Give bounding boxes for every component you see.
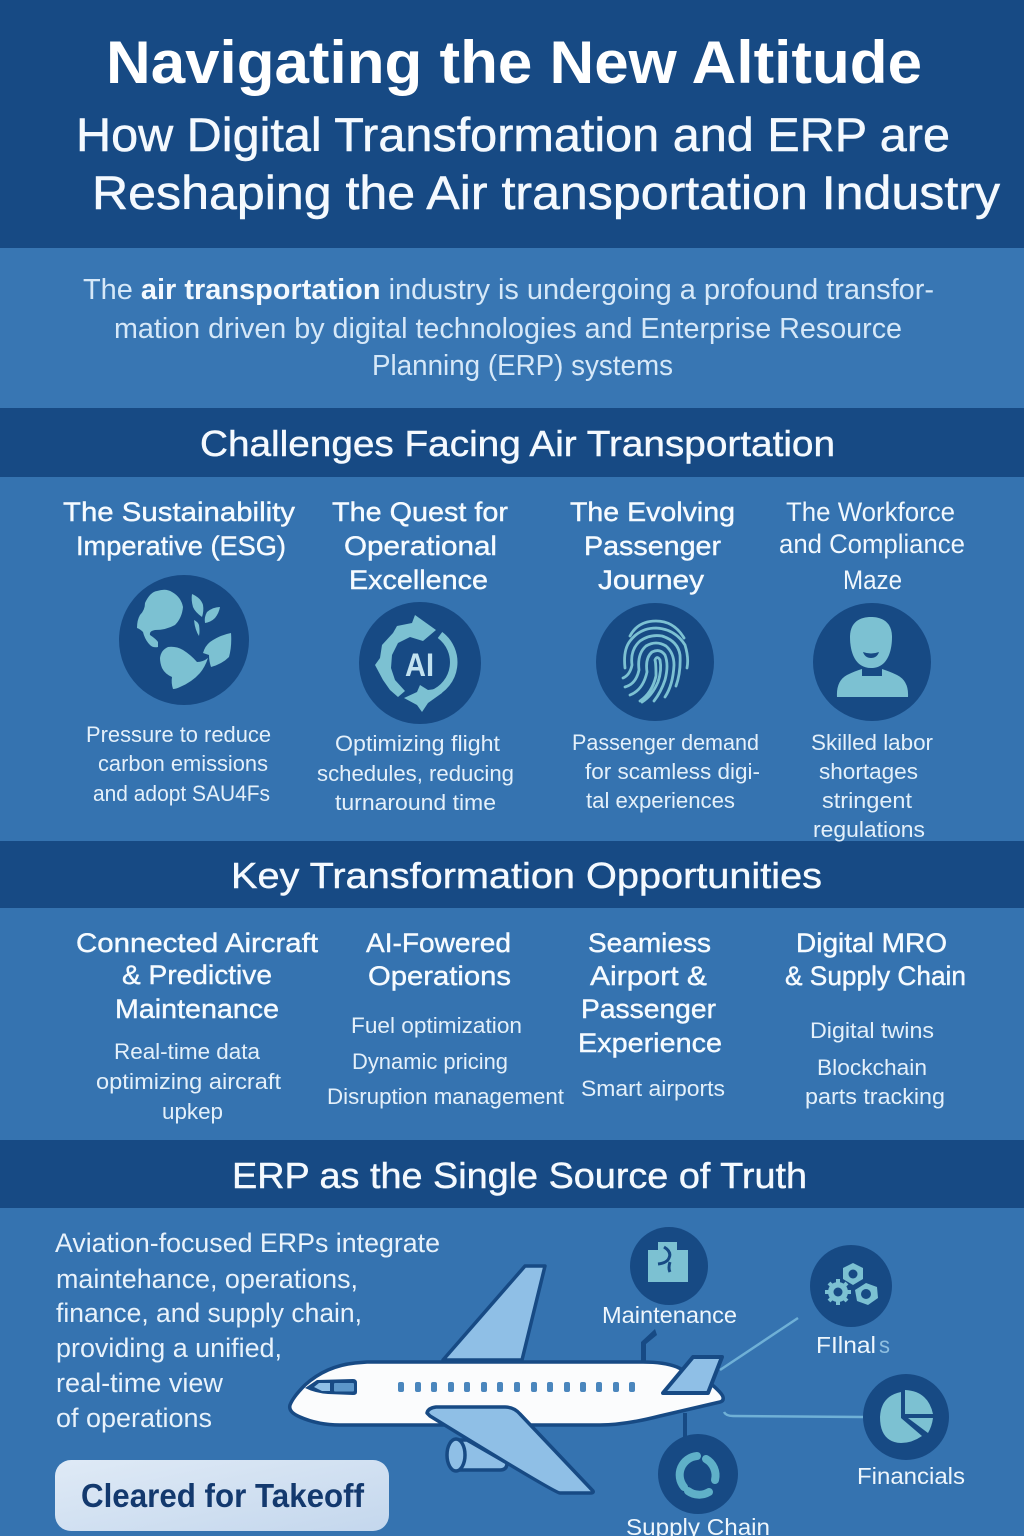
panel: connected aircraft: Real-time data bbox=[114, 1039, 261, 1064]
panel: introduction: The air transportation industry is undergoing a profound transfor- bbox=[83, 274, 934, 306]
panel: digital MRO: & Supply Chain bbox=[785, 961, 966, 991]
panel: connected aircraft: upkep bbox=[162, 1099, 223, 1124]
antenna bbox=[641, 1329, 657, 1362]
panel: AI operations: Disruption management bbox=[327, 1084, 564, 1109]
description: passenger journey bbox=[572, 730, 760, 813]
heading: workforce: The Workforce bbox=[786, 497, 955, 527]
icon: maintenance toolbox bbox=[630, 1227, 708, 1305]
description: workforce: shortages bbox=[819, 759, 918, 784]
text block: ERP description: real-time view bbox=[56, 1368, 223, 1398]
section heading: ERP: ERP as the Single Source of Truth bbox=[232, 1155, 807, 1196]
panel: AI operations: Dynamic pricing bbox=[352, 1049, 508, 1074]
icon: AI cycle: AI bbox=[405, 647, 434, 683]
panel: introduction: Planning (ERP) systems bbox=[372, 350, 673, 382]
airplane illustration bbox=[290, 1266, 723, 1493]
heading: passenger journey bbox=[570, 497, 735, 595]
icon: fingerprint bbox=[596, 603, 714, 721]
panel: introduction: mation driven by digital technologies and Enterprise Resource bbox=[114, 313, 902, 345]
node: parts: s bbox=[879, 1332, 890, 1358]
description: workforce bbox=[811, 730, 933, 842]
connector: tail to financials bbox=[724, 1412, 863, 1417]
heading: sustainability: Imperative (ESG) bbox=[76, 531, 286, 561]
panel: connected aircraft: Connected Aircraft bbox=[76, 928, 319, 958]
connector: fuselage to supply chain bbox=[683, 1413, 687, 1440]
cabin windows bbox=[398, 1382, 635, 1392]
panel: digital MRO: parts tracking bbox=[805, 1084, 945, 1109]
node: maintenance bbox=[602, 1227, 737, 1328]
panel: connected aircraft bbox=[76, 928, 319, 1124]
panel: AI operations bbox=[327, 928, 564, 1109]
panel: AI operations: AI-Fowered bbox=[366, 928, 511, 958]
text block: ERP description bbox=[55, 1228, 440, 1433]
description: sustainability: carbon emissions bbox=[98, 751, 268, 776]
panel: AI operations: Operations bbox=[368, 961, 511, 991]
panel: connected aircraft: & Predictive bbox=[122, 960, 272, 990]
description: workforce: Skilled labor bbox=[811, 730, 933, 755]
description: passenger journey: tal experiences bbox=[586, 788, 735, 813]
heading: sustainability bbox=[63, 497, 296, 561]
icon: pie chart bbox=[863, 1374, 949, 1460]
icon: gears bbox=[810, 1245, 892, 1327]
section heading: challenges bbox=[0, 408, 1024, 477]
panel: seamless airport bbox=[578, 928, 725, 1101]
description: operational excellence: turnaround time bbox=[335, 790, 496, 815]
panel: sustainability challenge bbox=[63, 497, 296, 806]
panel: digital MRO: Digital twins bbox=[810, 1018, 934, 1043]
node: financials bbox=[857, 1374, 965, 1489]
callout button bbox=[55, 1460, 389, 1531]
description: workforce: stringent bbox=[822, 788, 912, 813]
cockpit windows bbox=[305, 1379, 357, 1395]
node: parts: FIlnal bbox=[816, 1332, 876, 1358]
panel: connected aircraft: Maintenance bbox=[115, 994, 279, 1024]
panel: seamless airport: Passenger bbox=[581, 994, 716, 1024]
description: operational excellence: schedules, reducing bbox=[317, 761, 514, 786]
description: sustainability bbox=[86, 722, 271, 806]
title banner bbox=[0, 0, 1024, 248]
fuselage bbox=[290, 1362, 723, 1425]
node: parts bbox=[810, 1245, 892, 1358]
text block: ERP description: providing a unified, bbox=[56, 1333, 282, 1363]
heading: workforce: and Compliance bbox=[779, 529, 965, 559]
tail fin bbox=[663, 1357, 722, 1393]
description: sustainability: Pressure to reduce bbox=[86, 722, 271, 747]
subtitle: How Digital Transformation and ERP are bbox=[76, 108, 950, 161]
description: operational excellence: Optimizing flight bbox=[335, 731, 500, 756]
icon: globe with leaves bbox=[119, 575, 249, 705]
node: financials: Financials bbox=[857, 1463, 965, 1489]
text block: ERP description: finance, and supply chain, bbox=[56, 1298, 362, 1328]
panel: operational excellence challenge bbox=[317, 497, 514, 815]
description: sustainability: and adopt SAU4Fs bbox=[93, 781, 270, 806]
node: maintenance: Maintenance bbox=[602, 1302, 737, 1328]
section heading: challenges: Challenges Facing Air Transportation bbox=[200, 423, 835, 464]
text block: ERP description: of operations bbox=[56, 1403, 212, 1433]
text block: ERP description: Aviation-focused ERPs integrate bbox=[55, 1228, 440, 1258]
panel: seamless airport: Smart airports bbox=[581, 1076, 725, 1101]
description: workforce: regulations bbox=[813, 817, 925, 842]
panel: seamless airport: Airport & bbox=[590, 961, 707, 991]
subtitle: Reshaping the Air transportation Industry bbox=[92, 166, 1001, 219]
icon: AI cycle bbox=[359, 602, 481, 724]
description: passenger journey: for scamless digi- bbox=[585, 759, 760, 784]
panel: workforce challenge bbox=[779, 497, 965, 842]
heading: workforce bbox=[779, 497, 965, 595]
callout button: Cleared for Takeoff bbox=[81, 1477, 365, 1514]
description: operational excellence bbox=[317, 731, 514, 815]
heading: operational excellence: Excellence bbox=[349, 565, 488, 595]
subtitle bbox=[76, 108, 1001, 219]
title: Navigating the New Altitude bbox=[106, 29, 922, 96]
heading: operational excellence: Operational bbox=[344, 531, 497, 561]
heading: passenger journey: Journey bbox=[598, 565, 705, 595]
panel: passenger journey challenge bbox=[570, 497, 760, 813]
section heading: opportunities: Key Transformation Opportunities bbox=[231, 855, 822, 896]
heading: passenger journey: Passenger bbox=[584, 531, 721, 561]
panel: digital MRO: Blockchain bbox=[817, 1055, 927, 1080]
heading: passenger journey: The Evolving bbox=[570, 497, 735, 527]
lower wing bbox=[427, 1407, 593, 1493]
heading: operational excellence bbox=[332, 497, 508, 595]
heading: sustainability: The Sustainability bbox=[63, 497, 296, 527]
panel: seamless airport: Experience bbox=[578, 1028, 722, 1058]
heading: workforce: Maze bbox=[843, 565, 902, 595]
panel: connected aircraft: optimizing aircraft bbox=[96, 1069, 281, 1094]
panel: AI operations: Fuel optimization bbox=[351, 1013, 522, 1038]
text block: ERP description: maintehance, operations, bbox=[56, 1264, 358, 1294]
section heading: ERP bbox=[0, 1140, 1024, 1208]
panel: seamless airport: Seamiess bbox=[588, 928, 711, 958]
icon: supply chain cycle bbox=[658, 1434, 738, 1514]
panel: introduction bbox=[0, 248, 1024, 408]
panel: digital MRO bbox=[785, 928, 966, 1109]
upper wing bbox=[443, 1266, 545, 1360]
engine bbox=[447, 1439, 507, 1471]
icon: person bbox=[813, 603, 931, 721]
description: passenger journey: Passenger demand bbox=[572, 730, 759, 755]
connector: tail to parts bbox=[720, 1318, 798, 1370]
node: supply chain bbox=[626, 1434, 770, 1536]
heading: operational excellence: The Quest for bbox=[332, 497, 508, 527]
panel: digital MRO: Digital MRO bbox=[796, 928, 947, 958]
section heading: opportunities bbox=[0, 841, 1024, 908]
